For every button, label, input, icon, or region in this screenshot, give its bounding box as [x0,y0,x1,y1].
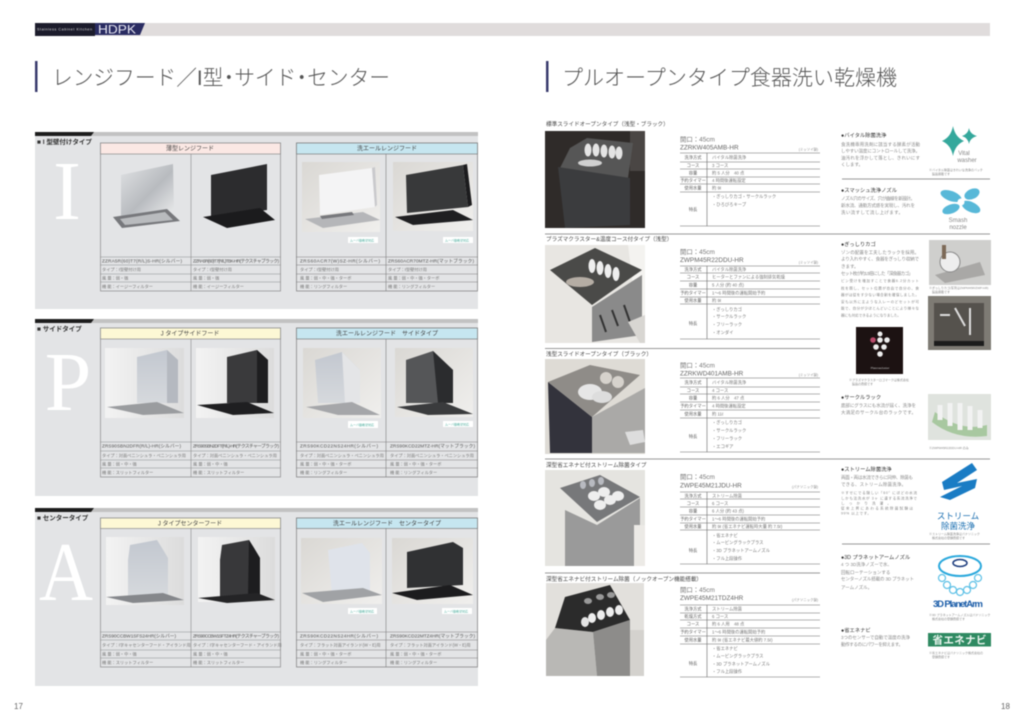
spec table: 特長 [689,660,698,667]
table: J type center hood: ZRS90CCBW1SFS24HR(シルバー) [102,634,176,639]
spec table: 特長 [689,547,698,554]
spec table: 約 9ℓ (省エネナビ最大値約 7.5ℓ) [712,636,773,644]
spec table: 容量 [689,394,698,402]
hood photo: silver side [105,348,184,418]
spec table: 特長 [689,206,698,213]
feature: 3D planet arm: ●3D プラネットアームノズル [841,553,911,561]
hood photo: matte black self-clean side [395,348,473,427]
icon: plasmacluster: 製品の商標です [852,381,873,386]
dishwasher 2 [545,235,820,343]
feature: packed basket: セット枚が約1.5倍にした「深食器カゴ」 [841,270,913,277]
feature: stream: 99% 以上です。 [841,510,871,516]
spec table: 容量 [689,508,698,514]
spec table: ・フリーラック [712,436,742,442]
spec table: 容量 [689,170,698,176]
panel: center type [35,508,478,686]
table: J type center hood: タイプ：I字キャセンターフード・アイランド用 [102,642,191,648]
spec table: ストリーム除菌 [712,492,743,500]
spec table: 4 時間後運転設定 [712,402,746,410]
spec heading: 開口：45cm [680,473,715,481]
feature: circle rack [841,394,916,416]
spec table: ・サークルラック [712,314,746,320]
spec table: ・省エネナビ [712,645,738,652]
feature: circle rack: 大満足のサークル台のラックです。 [841,409,916,416]
feature: circle rack: ●サークルラック [841,394,881,401]
table: J type center hood: タイプ：I字キャセンターフード・アイランド用 [193,642,282,648]
spec table: ・3D プラネットアームノズル [712,660,771,668]
spec table: 約 9ℓ [712,184,722,192]
hood photo: silver self-clean side: ムーバ御希望対応 [350,422,374,427]
dishwasher 1: ZZRKW405AMB-HR [680,144,739,152]
spec table: ・ひろびろキープ [712,201,747,208]
spec table: コース [687,501,699,506]
table: J type center hood [100,518,282,667]
table: J type center hood: 風 量：弱・中・強 [193,650,228,658]
hood photo: matte black: ムーバ御希望対応 [445,238,469,242]
table: self-cleaning hood: 洗エールレンジフード [357,144,417,152]
spec table: 約 6 人分 47 点 [712,394,745,402]
spec table: バイタル除菌洗浄 [712,154,747,161]
table: thin hood: タイプ：I型壁付け用 [102,266,141,273]
icon: 3D planet arm: ※3D プラネットアームノズルはパナソニック [929,612,990,617]
spec table: コース [687,622,699,626]
spec table: コース [687,163,699,168]
table: self-cleaning hood: ZRS60ACR70MTZ-HR(マットブラック) [388,258,474,265]
spec table [680,378,820,452]
spec table: 約 9ℓ [712,297,722,304]
feature: packed basket: 器がは従をす少ない場合割を確保しました。 [841,292,919,297]
table: J type center hood: 風 量：弱・中・強 [102,650,137,658]
dishwasher 1: (ミッソイ製) [799,146,818,152]
hood photo: matte black self-clean center: ムーバ御希望対応 [444,608,468,614]
feature: stream: 両面・両は水流できらに同伸、除菌も [841,474,913,481]
feature: packed basket: 器にも対応できるようになりました。 [841,312,901,318]
spec table: 6 コース [712,501,728,506]
feature: smash nozzle: ●スマッシュ洗浄ノズル [841,186,898,194]
table: J type side hood: J タイプサイドフード [161,330,219,338]
table: self-cleaning side hood: 風 量：弱・中・強・ターボ [300,460,351,468]
feature: stream: ●ストリーム除菌洗浄 [841,465,892,473]
hood photo: matte black self-clean side: ムーバ御希望対応 [445,422,469,426]
dishwasher 5: 深型省エネナビ付ストリーム除菌（ノックオープン機能搭載） [546,575,702,583]
table: self-cleaning center hood: 機 能：リングフィルター [390,659,437,666]
icon: eco navi: 省エネナビ [932,634,986,646]
dishwasher 3 [545,350,820,454]
hood photo: silver self-clean center: ムーバ御希望対応 [350,608,374,614]
table: J type side hood: 風 量：弱・中・強 [102,460,137,468]
photo [545,470,645,566]
spec table: ヒーターとファンによる強制排気乾燥 [712,274,786,280]
table: self-cleaning center hood: 風 量：弱・中・強・ターボ [390,650,441,658]
table: J type side hood [100,328,281,477]
table: J type side hood: 機 能：スリットフィルター [102,469,153,476]
table: self-cleaning hood: 機 能：リングフィルター [388,283,435,290]
feature: packed basket: きます。 [841,263,859,270]
page number 18: 18 [1001,702,1010,711]
hood photo: silver [113,164,180,228]
spec table [680,492,820,564]
spec heading: 開口：45cm [680,248,715,256]
feature: packed basket: 能で、自分が少ほとんどいことにより様々な [841,306,919,310]
dishwasher 1 [545,120,820,228]
table: thin hood: 薄型レンジフード [166,144,214,152]
table: self-cleaning side hood: ZRS90KCD22MTZ-HR(マットブラック) [390,443,475,450]
table: self-cleaning center hood: タイプ：フラット対面アイランド(W・E)用 [390,642,471,648]
icon: 3D planet arm: 株式会社の登録商標です [932,616,965,621]
spec table: 洗浄方式 [684,154,702,161]
hood photo: silver self-clean side [303,348,381,428]
photos: basket [928,240,991,350]
table: thin hood: タイプ：I型壁付け用 [193,266,232,273]
title: dishwasher page: プルオープンタイプ食器洗い乾燥機 [562,67,897,90]
spec table: 約 5 人分 40 点 [712,170,745,176]
icon: stream logo: ※ストリーム除菌洗浄はパナソニック [929,531,980,536]
big letter I: I [53,145,81,238]
feature: eco navi: ●省エネナビ [841,626,871,634]
table: thin hood: ZZRA5R(60)T7(R/L)TBK-HR(テクスチャブラック) [193,258,279,265]
header band [35,23,990,36]
panel: I type [35,132,478,309]
spec table: 使用水量 [684,523,702,530]
icon: stream logo: 株式会社の登録商標です [932,535,965,540]
feature: smash nozzle: 洗い流すして流し上げます。 [841,209,903,216]
icon: plasmacluster [849,327,909,386]
spec table: 洗浄方式 [684,606,702,612]
feature: smash nozzle: 新水流、通勤方式感を実現し、汚れを [841,202,915,209]
feature: stream: しかも法洗水が 3ヶ に達する系流洗浄で [841,496,917,500]
feature: packed basket: より入れやすく、食器をぎっしり収納で [841,256,920,262]
spec table: 洗浄方式 [684,492,702,500]
dishwasher 3: 浅型スライドオープンタイプ（ブラック） [546,350,652,358]
spec heading: 開口：45cm [680,586,715,594]
dishwasher 1: 標準スライドオープンタイプ（浅型・ブラック） [546,120,669,128]
spec table: 使用水量 [684,184,702,192]
section label: ■ センタータイプ [37,513,89,522]
dishwasher 4: 深型省エネナビ付ストリーム除菌タイプ [546,461,647,469]
spec table: 3 コース [712,163,728,168]
icon: smash nozzle: nozzle [949,225,967,231]
feature: stream: ※すせにでる隠しい「60° にほどの水流 [841,490,917,495]
icon: smash nozzle [939,186,982,231]
table: thin hood [100,143,281,291]
dishwasher 4: (パナソニック製) [792,484,818,489]
big letter A: A [39,526,93,619]
table: self-cleaning side hood: タイプ：対面ペニンシュラ・ペニンシュラ用 [390,452,474,459]
panel: side type [35,319,478,496]
feature: packed basket: ●ぎっしりカゴ [841,240,876,248]
dishwasher 3: (ミッソイ製) [799,372,818,377]
icon: 3D planet arm: 3D PlanetArm [933,599,983,610]
table: thin hood: 機 能：イージーフィルター [102,283,153,290]
icon: vital washer: 製品搭載です [932,171,950,176]
dishwasher 4: ZWPE45M21JDU-HR [680,482,742,490]
spec table [680,266,820,339]
feature: vital washer: 油汚れを浮かして落とし、きれいにす [841,154,920,162]
spec table: バイタル除菌洗浄 [712,266,747,273]
table: self-cleaning side hood: 機 能：リングフィルター [300,469,347,476]
spec heading: 開口：45cm [680,136,715,144]
spec table: ・サークルラック [712,428,746,434]
spec table: 5 人分 (約 40 点) [712,282,745,288]
dishwasher 5: ZWPE45M21TDZ4HR [680,595,744,602]
feature: 3D planet arm [841,553,914,591]
feature: packed basket [841,240,920,318]
spec table: ・フル上段操作 [712,555,743,562]
table: J type center hood: ZRS90CCBW1SFTZ4HR(テクスチャーブラック) [193,633,279,640]
spec table: 4 時間後運転設定 [712,177,746,184]
photo [546,583,644,676]
feature: stream: できる、ストリーム除菌洗浄。 [841,481,906,488]
hood photo: white: ムーバ御希望対応 [350,238,374,242]
spec table: 予約タイマー [680,516,706,522]
spec table: ・フル上段操作 [712,668,743,675]
feature: packed basket: 枚を既し、セット位置が自由で自分の、食 [841,286,919,290]
table: thin hood: 風 量：弱・強 [102,274,129,282]
feature: stream [841,465,917,516]
feature: packed basket: 安も以外に主ような入レーのどセットが可 [841,299,919,304]
table: self-cleaning side hood: タイプ：対面ペニンシュラ・ペニンシュラ用 [300,452,384,459]
photos: basket: 製品搭載です [932,289,950,294]
feature: stream: しっかり洗濯。 [841,500,891,506]
table: self-cleaning side hood: 機 能：リングフィルター [390,469,437,476]
section label: ■ I 型壁付けタイプ [37,137,92,146]
feature: vital washer: しやすい温度にコントロールして洗浄。 [841,148,920,154]
table: self-cleaning center hood: 機 能：リングフィルター [300,659,347,666]
icon: stream logo: ストリーム [937,511,979,521]
spec table: ・ぎっしりカゴ [712,306,743,313]
title: range hood page: レンジフード／I型・サイド・センター [52,67,390,90]
dishwasher 2: ZWPM45R22DDU-HR [680,257,744,264]
feature: packed basket: ビン受けを増加すことで食器6.2分カット [841,278,919,283]
feature: packed basket: ゾンの配置を工夫したラックを採用。 [841,249,919,256]
photo: circle rack [928,394,991,450]
table: self-cleaning hood: タイプ：I型壁付け用 [300,266,339,273]
feature: vital washer: 食洗機専用洗剤に該当する酵素が活動 [841,141,920,148]
table: thin hood: 機 能：イージーフィルター [193,283,244,290]
spec table [680,153,820,226]
feature: vital washer [841,131,920,168]
spec table: 使用水量 [684,297,702,304]
icon: eco navi: ※省エネナビはパナソニック株式会社の [929,650,983,655]
spec table: ・オンダイ [712,329,733,336]
brand name: Stainless Cabinet Kitchen [37,28,92,32]
page number 17: 17 [14,702,23,711]
feature: vital washer: ●バイタル除菌洗浄 [841,131,887,139]
spec table: ・エコギア [712,444,733,450]
table: self-cleaning center hood: 洗エールレンジフード センタータイプ [333,520,441,528]
spec table: 4 コース [712,388,728,393]
table: self-cleaning center hood: ZRS90KCD22MTZ4HR(マットブラック) [390,633,475,640]
table: self-cleaning side hood: ZRS90KCD22NS24HR(シルバー) [300,444,378,449]
table: self-cleaning hood: タイプ：I型壁付け用 [388,266,427,273]
spec table: 洗浄方式 [684,379,702,386]
icon: plasmacluster: ※プラズマクラスターロゴマークは株式会社 [849,377,909,382]
table: self-cleaning hood: 風 量：弱・中・強・ターボ [388,274,439,282]
table: thin hood: ZZRA5R(60)T7(R/L)S-HR(シルバー) [102,259,182,264]
icon: vital washer: ※バイタル除菌はきれいな洗浄のバッチ [929,167,983,172]
table: self-cleaning center hood: ZRS90KCD22NS24HR(シルバー) [300,634,378,639]
spec table: 約 6 人用 48 点 [712,620,745,628]
photos: basket: ※ぎっしりカゴ(写真はZWPM45R/ZWP-HR) [929,285,988,290]
feature: circle rack: 底部にグラスにも水流が届く、洗浄を [841,402,916,409]
spec table: 特長 [689,433,698,440]
spec table: ・ムービングラックプラス [712,652,763,660]
spec table: 6 人分 (約 43 点) [712,508,745,514]
table: self-cleaning center hood: タイプ：フラット対面アイランド(W・E)用 [300,642,381,648]
hood photo: matte black [393,162,473,243]
dishwasher 2: プラズマクラスター&温度コース付タイプ（浅型） [546,235,672,243]
feature: smash nozzle [841,186,915,216]
spec table: 1～6 時間後の運転開始予約 [712,516,766,522]
table: J type side hood: 風 量：弱・中・強 [193,460,228,468]
header band: HDPK [98,24,136,36]
icon: eco navi [928,633,991,659]
dishwasher 2: (ミッソイ製) [799,260,818,264]
hood photo: black side [196,348,274,418]
hood photo: silver center [106,537,184,605]
table: thin hood: 風 量：弱・強 [193,274,220,282]
hood photo: matte black self-clean center [392,538,473,614]
section label: ■ サイドタイプ [37,324,82,333]
table: self-cleaning center hood [296,518,478,667]
hood photo: white [302,162,380,243]
spec table: 予約タイマー [680,402,706,410]
feature: 3D planet arm: センターノズル搭載の 3D プラネット [841,576,914,582]
spec table [680,605,820,677]
spec table: 使用水量 [684,410,702,418]
table: J type side hood: ZRS90SBN2DFR(R/L)-HR(シルバー) [102,444,181,449]
dishwasher 5 [546,575,820,677]
table: self-cleaning hood: 風 量：弱・中・強・ターボ [300,274,351,282]
spec table: バイタル除菌洗浄 [712,379,747,386]
table: J type center hood: J タイプセンターフード [158,520,222,528]
feature: eco navi: 3つのセンサーで自動で温度の洗浄 [841,634,910,641]
feature: eco navi [841,626,910,648]
table: self-cleaning hood: ZRS60ACR7(W)SZ-HR(シルバー) [300,259,380,264]
icon: vital washer: Vital [958,151,970,157]
spec table: 1～6 時間後の運転開始予約 [712,628,766,636]
spec heading: 開口：45cm [680,362,715,370]
dishwasher 3: ZZRKWD401AMB-HR [680,370,744,378]
spec table: 6 コース [712,614,728,619]
spec table: 特長 [689,320,698,327]
spec table: 乾燥方式 [684,613,702,620]
photo [545,131,645,228]
icon: stream logo: 除菌洗浄 [941,521,975,531]
dishwasher 5: (パナソニック製) [792,597,818,602]
table: J type side hood: ZRS90SBN2DFT(R/L)-HR(テクスチャーブラック) [193,443,279,450]
spec table: ・フリーラック [712,322,742,328]
spec table: ・ぎっしりカゴ [712,419,743,426]
section dividers: dishwashers [545,179,990,573]
hood photo: silver self-clean center [301,538,382,614]
table: self-cleaning center hood: 風 量：弱・中・強・ターボ [300,650,351,658]
feature: smash nozzle: ノズル穴のサイズ、穴が曲線を新設計。 [841,195,915,202]
table: self-cleaning side hood [296,328,478,477]
photo [545,245,645,343]
spec table: 1～6 時間後の運転開始予約 [712,290,766,296]
spec table: 使用水量 [684,636,702,644]
spec table: 予約タイマー [680,628,706,636]
table: self-cleaning side hood: 洗エールレンジフード サイドタイプ [336,330,438,338]
big letter P: P [45,336,91,429]
table: J type side hood: 機 能：スリットフィルター [193,469,244,476]
icon: eco navi: 登録商標です [932,654,950,659]
spec table: コース [687,274,699,280]
table: self-cleaning hood [296,143,478,291]
feature: eco navi: 動作するのにパワーを抑えます。 [841,641,903,648]
spec table: 予約タイマー [680,177,706,184]
spec table: 容量 [689,282,698,288]
table: self-cleaning hood: 機 能：リングフィルター [300,283,347,290]
spec table: 予約タイマー [680,290,706,296]
icon: smash nozzle: Smash [949,218,967,224]
feature: 3D planet arm: 回転ローテーションする [841,569,890,576]
icon: plasmacluster: Plasmacluster [871,366,889,370]
spec table: 約 11ℓ [712,410,724,418]
hood photo: black [203,164,275,228]
icon: vital washer: washer [956,158,977,164]
spec table: ストリーム除菌 [712,606,743,612]
table: self-cleaning side hood: 風 量：弱・中・強・ターボ [390,460,441,468]
feature: 3D planet arm: 4 つ 3D洗浄ノズーで水、 [841,561,892,568]
table: J type center hood: 機 能：スリットフィルター [102,659,153,666]
spec table: ・省エネナビ [712,532,738,539]
spec table: 洗浄方式 [684,266,702,273]
feature: vital washer: くします。 [841,161,863,168]
icon: 3D planet arm [929,556,990,621]
icon: stream logo [929,463,980,540]
feature: stream: 従来上昇にあわる系統除菌試験は [841,506,913,510]
table: J type center hood: 機 能：スリットフィルター [193,659,244,666]
dishwasher 4 [545,461,820,566]
table: J type side hood: タイプ：対面ペニンシュラ・ペニンシュラ用 [102,452,186,459]
spec table: ・ぎっしりカゴ・サークルラック [712,193,776,200]
spec table: ・3D プラネットアームノズル [712,547,771,554]
spec table: ・ムービングラックプラス [712,539,763,546]
spec table: 約 9ℓ (省エネナビ運転時大量 約 7.5ℓ) [712,523,783,530]
table: J type side hood: タイプ：対面ペニンシュラ・ペニンシュラ用 [193,452,277,459]
photo [545,359,645,454]
photo: circle rack: ※ZWPM45R22DDU-HR のみ [929,445,969,450]
icon: vital washer [929,126,983,176]
spec table: コース [687,388,699,393]
hood photo: black center [198,537,275,603]
feature: 3D planet arm: アームノズル。 [841,584,872,591]
